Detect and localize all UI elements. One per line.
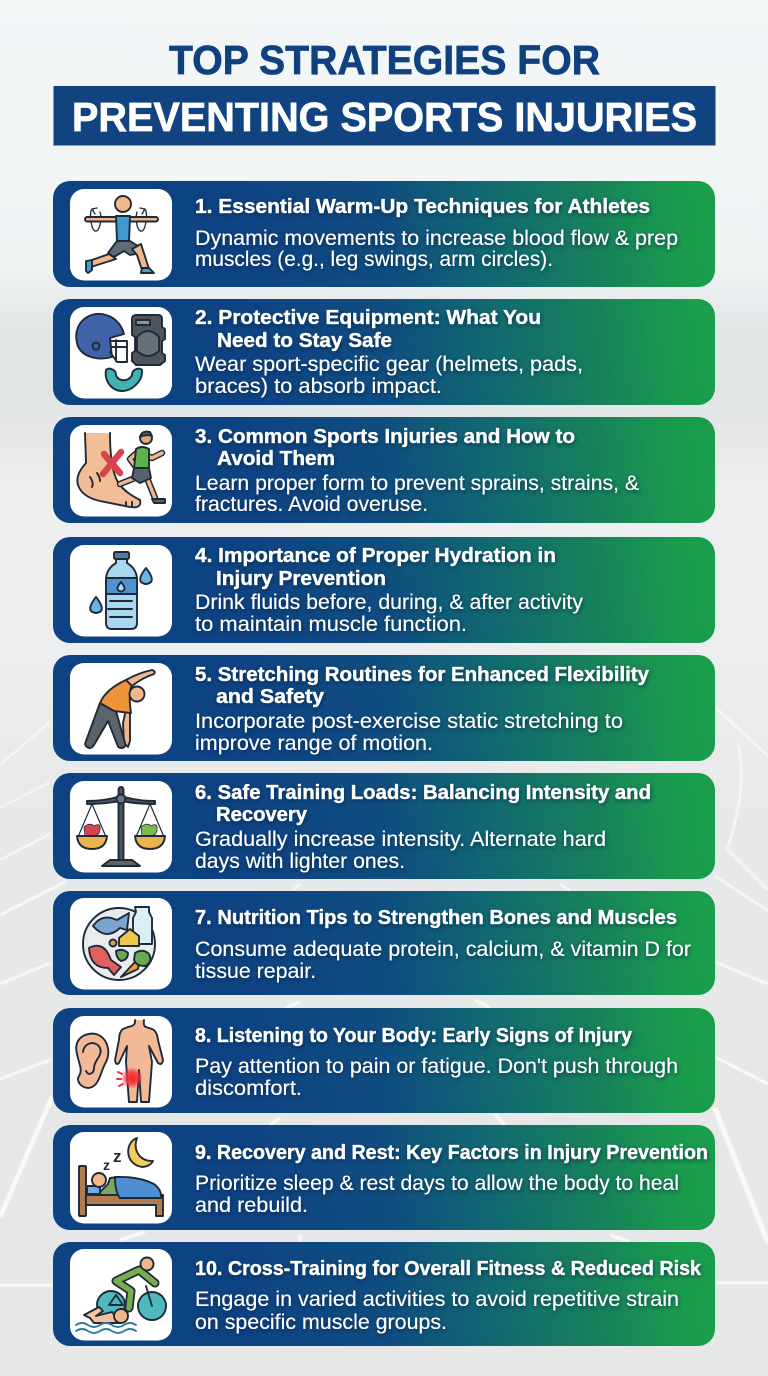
description 1: Dynamic movements to increase blood flow & prep [195, 227, 678, 250]
heading 2 [195, 307, 541, 352]
heading 4: 4. Importance of Proper Hydration in [195, 545, 556, 567]
panel: 1 warm-up [53, 181, 715, 287]
heading 6: Recovery [216, 804, 308, 826]
description 2: braces) to absorb impact. [195, 375, 442, 398]
heading 3: Avoid Them [217, 448, 335, 470]
description 5: improve range of motion. [195, 732, 433, 755]
icon: cyclist and swimmer [76, 1258, 166, 1333]
panel: 3 common injuries [53, 417, 715, 523]
description 7 [195, 938, 691, 983]
heading 3 [195, 426, 575, 470]
description 6: days with lighter ones. [195, 850, 405, 873]
description 1: muscles (e.g., leg swings, arm circles). [195, 248, 553, 271]
icon: sleep letters: z [103, 1157, 110, 1173]
heading 6 [195, 782, 651, 826]
heading 5: and Safety [216, 686, 325, 708]
heading 5 [195, 664, 650, 708]
heading 2: Need to Stay Safe [217, 330, 392, 352]
panel: 10 cross-training [53, 1242, 715, 1346]
icon: sleeping person in bed with moon [79, 1138, 163, 1216]
description 5 [195, 710, 623, 755]
description 4: Drink fluids before, during, & after activity [195, 591, 583, 614]
title line 1: TOP STRATEGIES FOR [169, 37, 600, 83]
panel: 8 listening to your body [53, 1008, 715, 1113]
heading 1: 1. Essential Warm-Up Techniques for Athletes [195, 196, 650, 218]
icon: side stretch figure [85, 670, 155, 748]
description 9: and rebuild. [195, 1194, 308, 1217]
description 10 [195, 1288, 679, 1334]
icon: balance scale [77, 787, 165, 866]
description 1 [195, 227, 678, 271]
description 10: on specific muscle groups. [195, 1311, 447, 1334]
icon: sleep letters: z [113, 1147, 122, 1166]
panel: 6 training loads [53, 773, 715, 879]
description 8: Pay attention to pain or fatigue. Don't push through [195, 1055, 678, 1078]
heading 2: 2. Protective Equipment: What You [195, 307, 541, 329]
description 8 [195, 1055, 678, 1100]
heading 7: 7. Nutrition Tips to Strengthen Bones and Muscles [195, 907, 677, 929]
description 9: Prioritize sleep & rest days to allow the body to heal [195, 1172, 679, 1195]
icon: helmet, knee pad, mouthguard [76, 314, 165, 391]
heading 6: 6. Safe Training Loads: Balancing Intensity and [195, 782, 651, 804]
heading 3: 3. Common Sports Injuries and How to [195, 426, 575, 448]
description 8: discomfort. [195, 1077, 302, 1100]
panel: 5 stretching [53, 655, 715, 761]
description 10: Engage in varied activities to avoid repetitive strain [195, 1288, 679, 1311]
heading 8: 8. Listening to Your Body: Early Signs of Injury [195, 1025, 633, 1047]
heading 4 [195, 545, 556, 590]
panel: 9 recovery and rest [53, 1125, 715, 1230]
description 5: Incorporate post-exercise static stretching to [195, 710, 623, 733]
icon: ear and body with pain spot [76, 1020, 163, 1102]
icon: sleep letters [103, 1147, 122, 1173]
description 3: fractures. Avoid overuse. [195, 493, 428, 516]
description 3: Learn proper form to prevent sprains, strains, & [195, 472, 639, 495]
panel: 7 nutrition [53, 891, 715, 995]
title [54, 37, 716, 146]
description 6: Gradually increase intensity. Alternate hard [195, 828, 606, 851]
description 7: Consume adequate protein, calcium, & vitamin D for [195, 938, 691, 961]
description 4 [195, 591, 583, 636]
heading 9: 9. Recovery and Rest: Key Factors in Injury Prevention [195, 1142, 708, 1164]
heading 5: 5. Stretching Routines for Enhanced Flexibility [195, 664, 650, 686]
description 2 [195, 353, 583, 398]
description 2: Wear sport-specific gear (helmets, pads, [195, 353, 583, 376]
heading 10: 10. Cross-Training for Overall Fitness & Reduced Risk [195, 1258, 702, 1280]
description 6 [195, 828, 606, 873]
panel: 4 hydration [53, 537, 715, 643]
heading 4: Injury Prevention [216, 568, 386, 590]
description 9 [195, 1172, 679, 1217]
icon: plate of healthy food [83, 907, 155, 980]
icon: lunging athlete [85, 196, 158, 273]
description 4: to maintain muscle function. [195, 613, 467, 636]
icon: injured foot and runner [77, 432, 165, 507]
icon: water bottle and drops [90, 552, 152, 629]
title banner: PREVENTING SPORTS INJURIES [72, 94, 697, 140]
panel: 2 protective equipment [53, 299, 715, 405]
description 3 [195, 472, 639, 516]
description 7: tissue repair. [195, 960, 316, 983]
